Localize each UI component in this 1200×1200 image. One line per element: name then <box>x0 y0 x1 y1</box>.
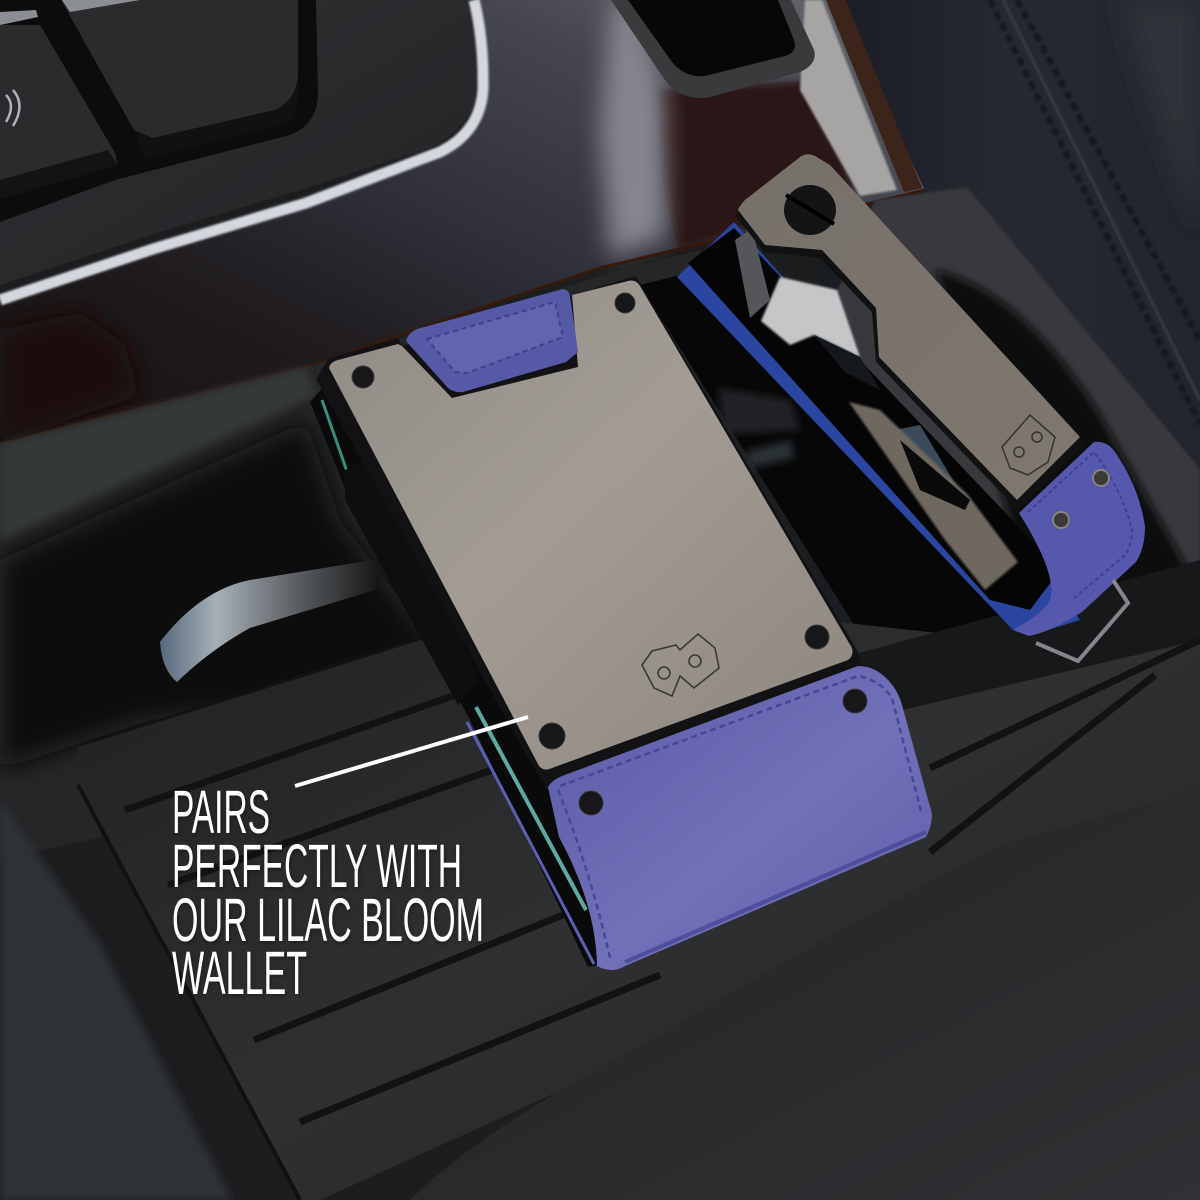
wallet <box>310 276 932 970</box>
logo <box>642 634 719 696</box>
plate edge <box>316 276 862 790</box>
elastic band <box>345 455 480 705</box>
lilac strap <box>1013 442 1145 636</box>
logo <box>1002 415 1055 475</box>
callout text: OUR LILAC BLOOM <box>172 886 484 954</box>
body <box>688 228 1060 610</box>
leather pull tab <box>406 289 578 392</box>
chrome trim <box>0 0 483 300</box>
cup slot <box>611 0 815 98</box>
top plate <box>738 154 1080 500</box>
plate shadow <box>735 160 1084 510</box>
callout text: PAIRS <box>172 778 270 846</box>
wood trim <box>0 0 925 444</box>
ring <box>1036 580 1128 661</box>
callout leader line <box>295 717 528 786</box>
right grey console panel <box>640 187 1200 680</box>
strap edge <box>677 222 1080 636</box>
buttons <box>0 0 298 199</box>
left lower seat <box>0 800 232 1200</box>
metal plate <box>329 281 852 770</box>
callout text <box>172 778 484 1007</box>
keychain organiser <box>677 154 1145 661</box>
textured console surface <box>0 250 700 860</box>
callout <box>172 717 528 1007</box>
seat leather with stitching <box>820 0 1200 640</box>
callout text: WALLET <box>172 939 307 1007</box>
lilac band <box>548 666 932 970</box>
screw <box>784 185 836 235</box>
tray <box>75 560 1200 1200</box>
keys <box>735 228 1018 590</box>
gear handle <box>160 558 385 682</box>
callout text: PERFECTLY WITH <box>172 832 462 900</box>
card stack <box>310 380 620 967</box>
foreground armrest <box>410 790 1200 1200</box>
tray ridges <box>125 640 1200 1122</box>
icon: hazard waves <box>6 90 20 126</box>
brushed metal panel <box>0 0 480 285</box>
strap rivets <box>1053 470 1109 528</box>
screws <box>352 293 867 815</box>
